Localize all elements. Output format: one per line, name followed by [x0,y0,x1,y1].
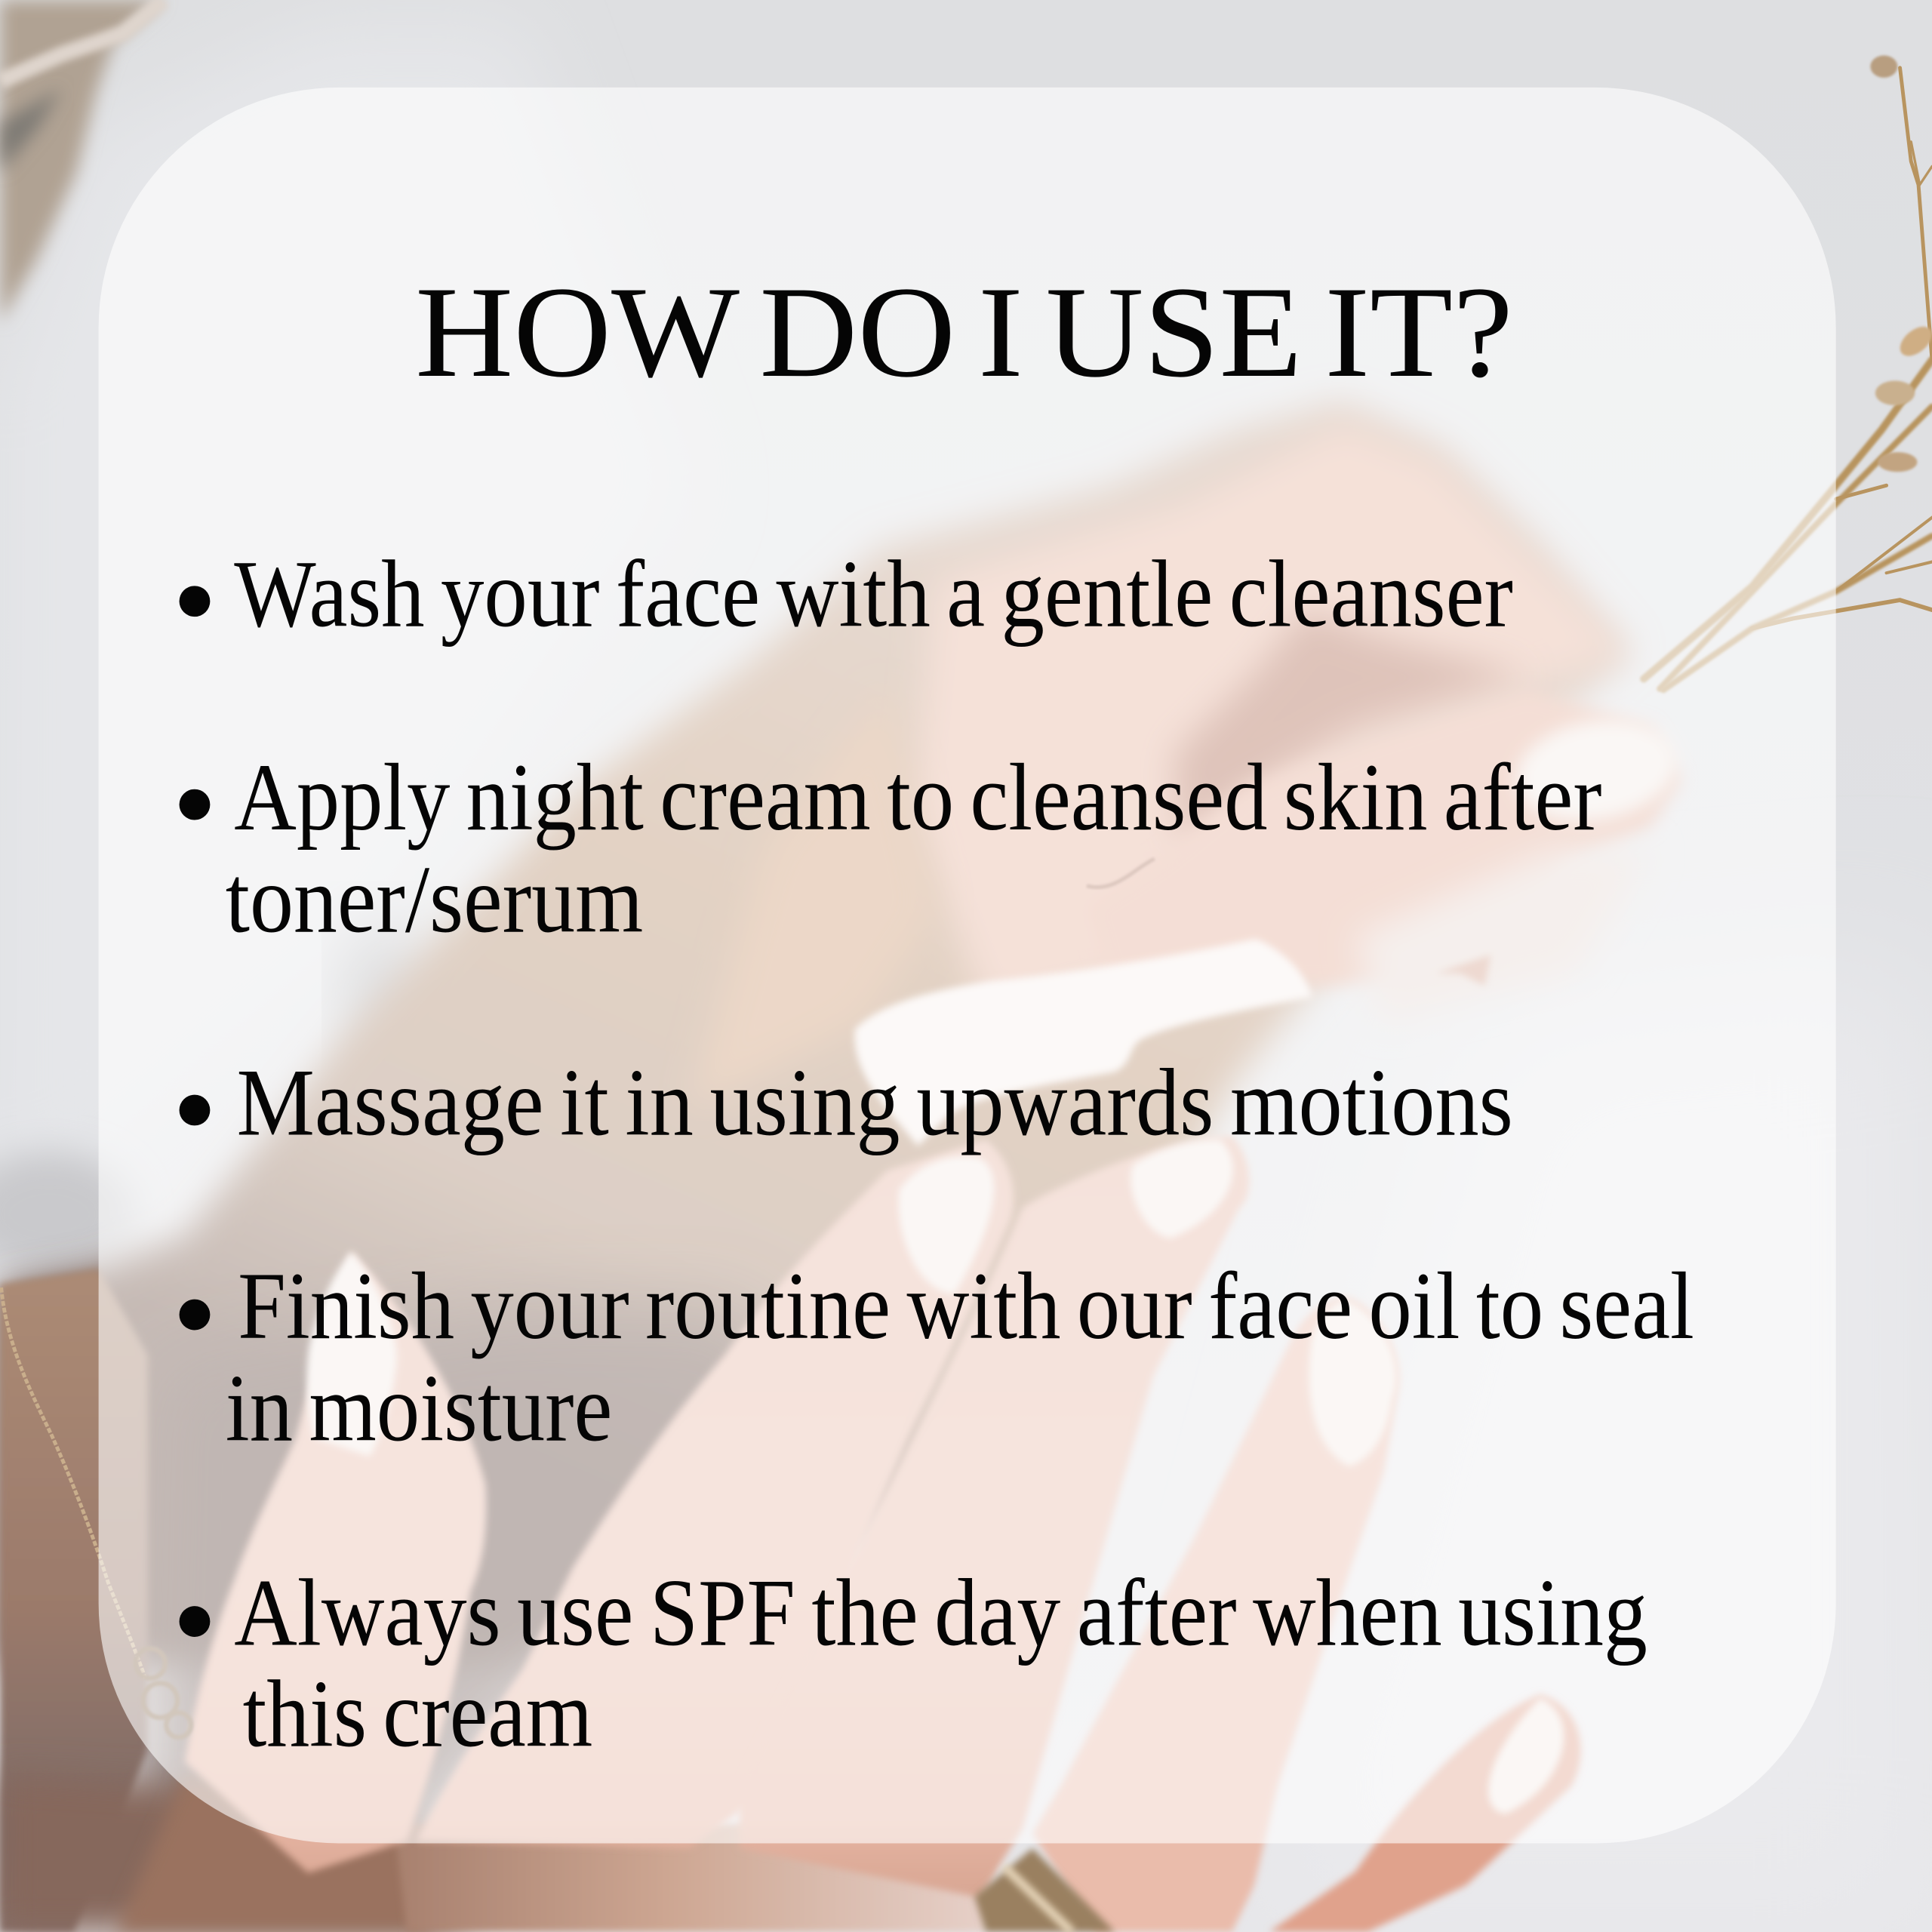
photo: arm and back of hand [0,401,1685,1663]
photo: dark shadow under arm [148,1306,801,1848]
photo: dark fold in corner [0,89,62,173]
photo: thumb nail [1508,707,1685,832]
photo: small skin spots [1435,955,1491,986]
step: use SPF [180,1560,1647,1767]
photo: gap between fingers [1174,610,1527,843]
photo: gold ring [974,1848,1115,1932]
photo: white cloth at left [0,25,690,1183]
photo: tan skin band [690,690,937,1109]
step: finish with face oil [180,1253,1694,1462]
photo: beige corner [0,0,163,323]
photo: fingers [185,1136,1581,1932]
photo: dried flower heads [1870,55,1932,472]
photo: hand at bottom left [115,1774,431,1932]
photo: thumb [1087,690,1681,986]
step: wash face: Wash your face with a gentle cleanser [234,540,1513,647]
step: finish with face oil: Finish your routine with our face oil to seal [238,1253,1694,1359]
photo: bottom skin band [394,1823,998,1932]
photo: light stripe in corner [0,0,164,82]
photo: bright table at right [1836,1060,1869,1152]
photo: outer wrist skin [0,1269,148,1932]
step: use SPF: this cream [243,1660,592,1767]
title: HOW DO I USE IT? [415,260,1513,405]
photo: warm skin on hand [912,425,1626,1011]
photo: gold chain bracelet [2,1287,146,1678]
step: apply night cream [180,744,1601,952]
photo: soft shadow on cloth [337,932,410,1013]
photo: knuckle crease [1087,859,1155,888]
photo: bracelet charm [136,1648,191,1737]
photo: fingernails [307,1140,1564,1814]
step: use SPF: Always use SPF the day after when using [234,1560,1647,1666]
photo: dried flower twigs [1644,68,1932,690]
photo: cream blob [854,939,1312,1146]
photo: thumb blur fade [1355,851,1651,1023]
step: apply night cream: toner/serum [226,846,643,952]
step: finish with face oil: in moisture [226,1355,612,1462]
step: massage: Massage it in using upwards motions [236,1050,1513,1156]
step: apply night cream: Apply night cream to cleansed skin after [234,744,1601,851]
